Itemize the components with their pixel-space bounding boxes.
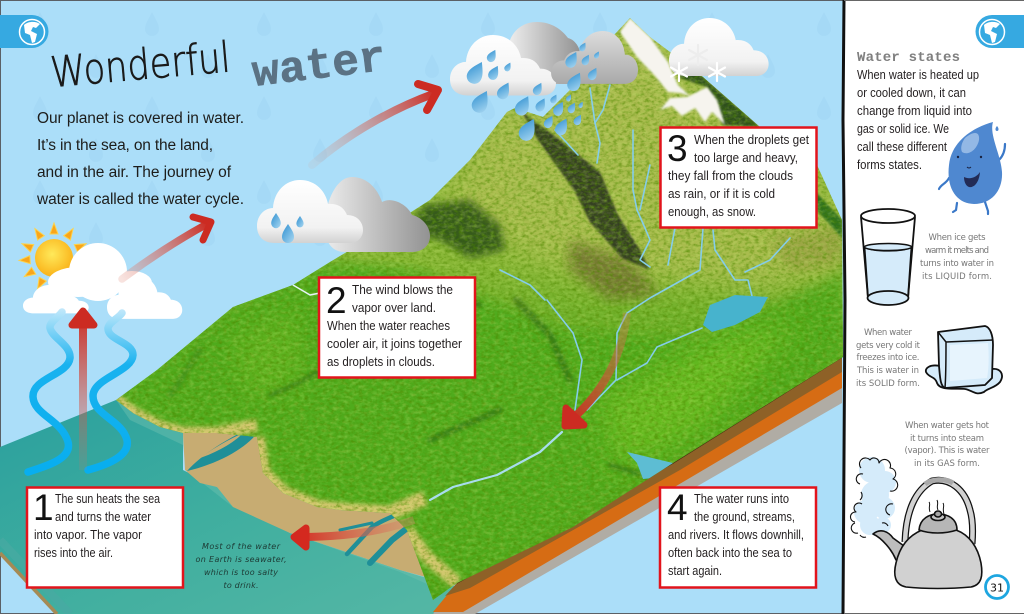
callout: step 3: [660, 128, 816, 228]
spout: [873, 531, 904, 560]
callout: step 1: rises into the air.: [34, 546, 113, 560]
callout: step 2: as droplets in clouds.: [327, 355, 435, 369]
snowflakes: [671, 45, 725, 81]
title word: water: water: [250, 34, 389, 100]
heading: water states: Water states: [857, 50, 960, 66]
callout: step 3: enough, as snow.: [668, 205, 756, 219]
snow lump: [660, 87, 725, 125]
callout: step 3: too large and heavy,: [694, 151, 798, 165]
small lake: [627, 452, 673, 479]
callout: step 1: [27, 487, 183, 588]
text block: liquid form: its LIQUID form.: [922, 272, 992, 282]
body: [895, 530, 982, 588]
callout: step 4: The water runs into: [694, 492, 789, 506]
text block: seawater note: which is too salty: [204, 568, 278, 577]
dark ridge shadow: [522, 112, 650, 270]
arrow: red runoff down the valley: [565, 313, 627, 426]
text block: water states explanation: change from liquid into: [857, 104, 972, 118]
callout: step 2: 2: [326, 280, 347, 321]
arrow: red from sun cloud to upper cloud: [122, 217, 211, 279]
callout: step 1: The sun heats the sea: [55, 492, 160, 506]
lake: [703, 295, 768, 332]
yellow coastal rims: [116, 400, 457, 583]
rocky brown valley: [570, 240, 660, 300]
valley creases: [170, 290, 660, 480]
raindrops on vapor cloud: [271, 213, 304, 243]
text block: liquid form: warm it melts and: [925, 246, 989, 256]
text block: seawater note: [196, 542, 286, 590]
heading: title: [49, 32, 389, 100]
icon: smiling water drop character: [939, 122, 1005, 214]
snow cap: [620, 18, 690, 96]
illustration: mountain landscape: [100, 0, 845, 614]
text block: gas form: (vapor). This is water: [904, 446, 990, 456]
callout: step 4: [660, 487, 816, 588]
text block: water states explanation: gas or solid ice. We: [857, 122, 949, 136]
callout: step 3: When the droplets get: [694, 133, 809, 147]
icon: globe tab right: [976, 15, 1024, 48]
text block: introduction: water is called the water cycle.: [36, 191, 244, 208]
terrain texture: [100, 0, 845, 614]
text block: introduction: Our planet is covered in water.: [37, 110, 244, 127]
callout: step 1: 1: [33, 487, 54, 528]
lid: [919, 514, 957, 533]
rivers: [293, 85, 790, 500]
callout: step 4: often back into the sea to: [668, 546, 792, 560]
callout: step 1: and turns the water: [55, 510, 151, 524]
callout: step 2: [319, 278, 475, 378]
text block: solid form: freezes into ice.: [856, 353, 920, 363]
green lowlands: [116, 262, 843, 590]
text block: seawater note: Most of the water: [202, 542, 281, 551]
icon: evaporation cloud: [23, 243, 182, 319]
arrow: red wind arrow to rain clouds: [312, 84, 438, 165]
handle: [905, 480, 973, 544]
yellow-green upper slopes: [440, 20, 842, 290]
callout: step 4: start again.: [668, 564, 722, 578]
text block: liquid form: [920, 233, 994, 282]
text block: gas form: When water gets hot: [905, 421, 990, 431]
callout: step 4: the ground, streams,: [694, 510, 795, 524]
text block: gas form: [904, 421, 990, 469]
text block: water states explanation: [857, 68, 979, 172]
arrow: blue water vapor right: [88, 313, 133, 470]
callout: step 1: into vapor. The vapor: [34, 528, 142, 542]
callout: step 2: The wind blows the: [352, 283, 453, 297]
text block: water states explanation: call these different: [857, 140, 947, 154]
callout: step 2: When the water reaches: [327, 319, 450, 333]
falling raindrops: [464, 41, 601, 143]
arrow: blue water vapor left: [28, 312, 70, 472]
text block: introduction: It’s in the sea, on the land,: [37, 137, 213, 154]
text block: liquid form: When ice gets: [928, 233, 986, 243]
text block: seawater note: on Earth is seawater,: [196, 555, 286, 564]
callout: step 2: cooler air, it joins together: [327, 337, 462, 351]
icon: globe tab left: [0, 15, 48, 48]
text block: solid form: [856, 328, 921, 389]
illustration: sandy shore and river delta: [183, 420, 455, 585]
text block: solid form: When water: [864, 328, 912, 338]
text block: liquid form: turns into water in: [920, 259, 994, 269]
cloud: snow cloud: [669, 18, 769, 81]
callout: step 4: and rivers. It flows downhill,: [668, 528, 804, 542]
text block: water states explanation: forms states.: [857, 158, 922, 172]
text block: introduction: and in the air. The journey of: [37, 164, 232, 181]
illustration: sea block: [0, 400, 470, 614]
icon: glass of liquid water: [861, 209, 915, 305]
forest patch: [405, 200, 505, 258]
page number: 31: [990, 582, 1004, 594]
callout: step 3: they fall from the clouds: [668, 169, 793, 183]
text block: gas form: it turns into steam: [910, 434, 984, 444]
callout: step 2: vapor over land.: [352, 301, 436, 315]
illustration: orange soil cross-section: [430, 355, 844, 614]
title word: Wonderful: Wonderful: [49, 32, 232, 97]
text block: introduction: [36, 110, 244, 208]
text block: seawater note: to drink.: [224, 581, 258, 590]
callout: step 3: 3: [667, 128, 688, 169]
text block: solid form: gets very cold it: [856, 341, 921, 351]
text block: gas form: in its GAS form.: [914, 459, 980, 469]
text block: solid form: its SOLID form.: [856, 379, 920, 389]
text block: solid form: This is water in: [856, 366, 919, 376]
icon: melting ice cube: [926, 326, 1002, 393]
page number: [986, 576, 1008, 598]
panel: right page: [843, 0, 1024, 614]
text block: water states explanation: or cooled down, it can: [857, 86, 966, 100]
arrow: red river into the sea: [294, 520, 414, 547]
cloud: white vapor cloud: [257, 180, 363, 243]
icon: steaming kettle: [850, 457, 982, 588]
arrow: red rising vapor: [72, 311, 94, 470]
callout: step 3: as rain, or if it is cold: [668, 187, 775, 201]
icon: sun: [19, 223, 88, 291]
callout: step 4: 4: [667, 487, 688, 528]
steam cloud: [850, 457, 898, 537]
text block: water states explanation: When water is heated up: [857, 68, 979, 82]
cloud: grey vapor cloud: [257, 177, 430, 252]
bright meadows: [600, 324, 784, 464]
cloud: rain clouds: [450, 22, 638, 143]
